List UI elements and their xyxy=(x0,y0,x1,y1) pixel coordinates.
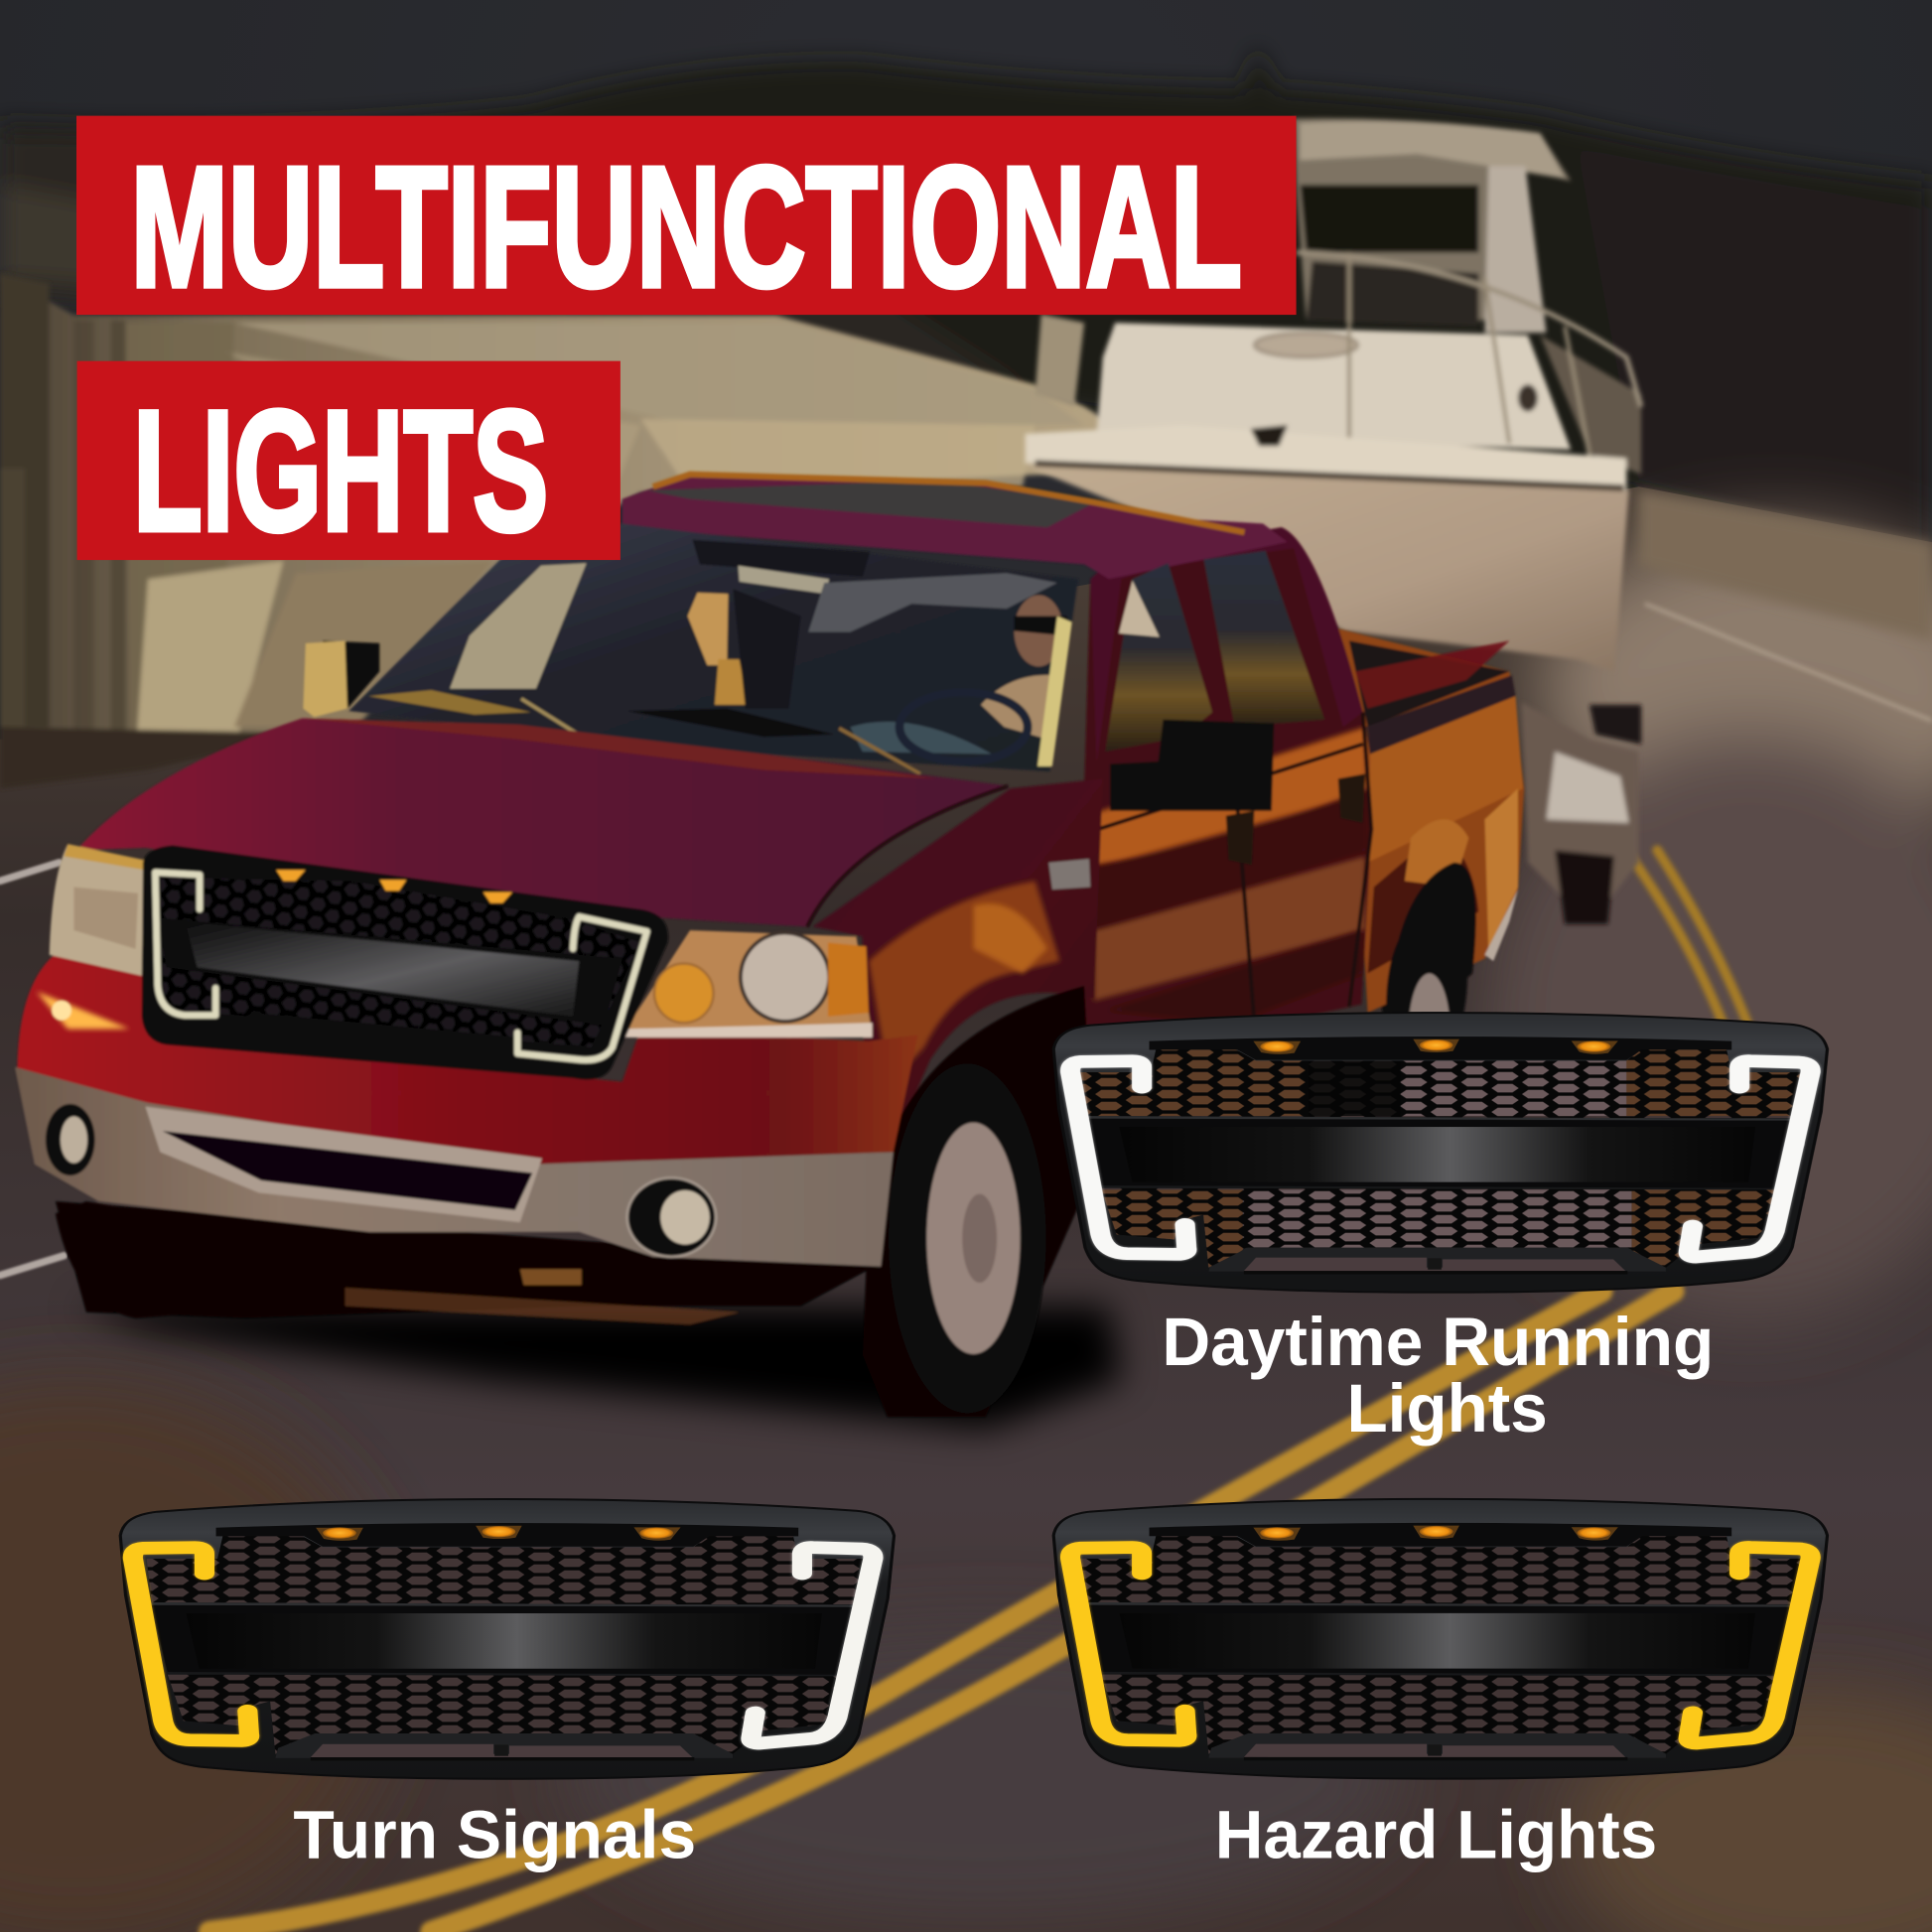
label: turn signals: Turn Signals xyxy=(293,1798,696,1873)
door details xyxy=(1090,712,1371,1023)
label: daytime running lights: Daytime Running xyxy=(1162,1305,1714,1380)
label: daytime running lights: Lights xyxy=(1346,1371,1548,1447)
door handles xyxy=(1226,773,1365,865)
mounted grille on truck xyxy=(142,845,668,1079)
background seen through upper mesh xyxy=(1077,1049,1805,1116)
chrome bumper xyxy=(15,1067,894,1324)
red front fascia xyxy=(17,955,918,1165)
title banner: multifunctional xyxy=(76,116,1297,323)
left headlight xyxy=(50,844,144,976)
road surface xyxy=(0,486,1932,1932)
truck bed xyxy=(1337,628,1524,1092)
bridge wall with motion blur xyxy=(0,274,1182,788)
title banner: multifunctional: MULTIFUNCTIONAL xyxy=(131,131,1242,323)
right retaining wall xyxy=(1639,490,1932,640)
right headlight xyxy=(625,930,873,1037)
left side mirror xyxy=(303,640,379,717)
grille: daytime running lights xyxy=(1053,1013,1828,1293)
windshield xyxy=(348,523,1078,773)
title banner: lights: LIGHTS xyxy=(133,375,548,567)
road lines xyxy=(0,850,1747,1932)
boat on trailer xyxy=(1026,118,1641,924)
title banner: lights xyxy=(77,361,621,567)
cab body xyxy=(622,475,1371,1033)
background seen through lower mesh xyxy=(1101,1189,1779,1269)
label: daytime running lights xyxy=(1162,1305,1714,1447)
front fender xyxy=(813,778,1103,1152)
hood xyxy=(76,719,1008,926)
side windows xyxy=(1105,551,1324,752)
truck shadow xyxy=(73,1307,1121,1430)
rear wheel xyxy=(1379,875,1467,1090)
right side mirror xyxy=(1110,720,1274,811)
grille: hazard lights xyxy=(1053,1499,1828,1779)
grille: turn signals xyxy=(120,1499,895,1779)
label: hazard lights: Hazard Lights xyxy=(1215,1798,1657,1873)
front wheel xyxy=(863,986,1094,1417)
pickup truck xyxy=(15,475,1524,1430)
